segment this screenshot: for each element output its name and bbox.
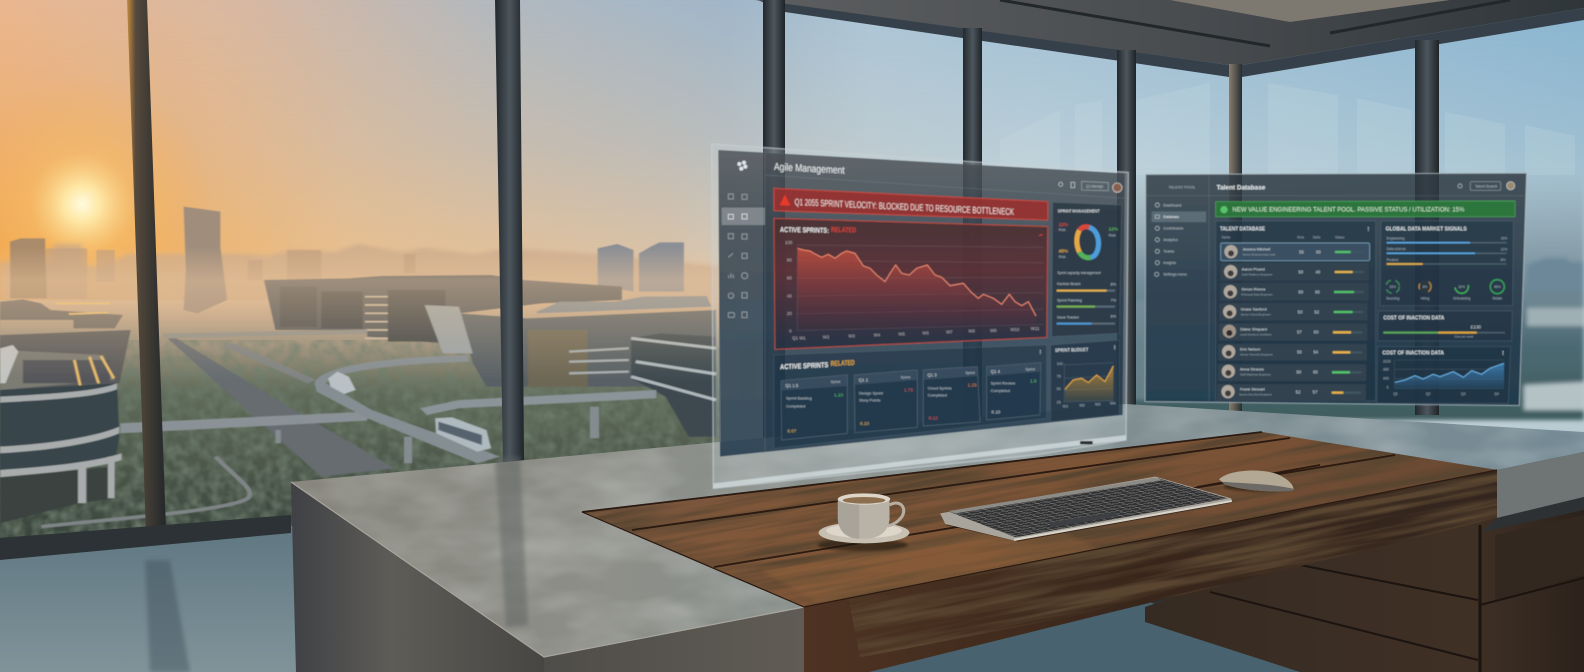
panel: cost of inaction area chart: Q2 — [1426, 392, 1431, 396]
card 1 — [781, 375, 847, 440]
panel: global market signals: 12% — [1501, 248, 1507, 252]
card 2: Design Sprint — [859, 390, 884, 395]
sidebar logo text: TALENT POOL — [1168, 184, 1196, 189]
wood grain — [585, 432, 1494, 605]
panel: global market signals — [1380, 221, 1513, 306]
panel: global market signals: Data science — [1387, 247, 1406, 251]
line chart: active sprints: 100 — [785, 240, 793, 245]
curved path — [41, 457, 250, 527]
row 2: Aaron Picard — [1242, 266, 1265, 271]
distant hazy skyline — [0, 244, 720, 335]
left building body — [0, 330, 131, 390]
row 5 — [1219, 323, 1367, 341]
campus and monorail — [0, 207, 720, 527]
card 3 — [923, 367, 980, 426]
far right campus building — [631, 333, 716, 437]
line chart: active sprints: 0 — [789, 329, 792, 334]
panel: sprint management donut and progress: Sprint capacity management — [1057, 270, 1101, 275]
floor — [0, 525, 1320, 672]
row 3: 60 — [1315, 289, 1320, 294]
panel: global market signals: Onboarding — [1453, 296, 1471, 300]
card 2: 8.10 — [860, 421, 869, 426]
line chart: active sprints: 40 — [787, 293, 792, 298]
train: upper — [328, 372, 356, 394]
panel: burndown area chart: 50 — [1057, 387, 1061, 391]
panel: sprint management donut and progress: SPRINT MANAGEMENT — [1058, 209, 1100, 214]
card 4: 8.10 — [991, 409, 1001, 414]
alert banner — [1216, 201, 1515, 217]
coffee cup and saucer — [818, 493, 909, 551]
card 1: 8.07 — [787, 429, 797, 434]
panel: burndown area chart: 75 — [1057, 375, 1061, 379]
panel: burndown area chart: 100 — [1057, 362, 1063, 366]
alert banner: NEW VALUE ENGINEERING TALENT POOL. PASSIVE STATUS / UTILIZATION: 15% — [1232, 207, 1464, 214]
sky through the windows — [0, 0, 1584, 445]
panel: cost of inaction area chart: 0 — [1387, 386, 1389, 390]
progress bars: Kanban Board — [1057, 282, 1080, 286]
glass lower edge — [713, 435, 1126, 488]
tree canopy texture — [0, 340, 720, 550]
row 4: 52 — [1314, 309, 1320, 314]
panel: global market signals: 8% — [1423, 285, 1427, 289]
panel: sprint management donut and progress: Risk — [1059, 228, 1066, 232]
panel: cost of inaction gauge — [1378, 311, 1512, 341]
window sill — [0, 515, 291, 560]
header and sidebar dividers — [1146, 176, 1525, 401]
sidebar navigation: Dashboard — [1163, 203, 1181, 207]
card 3: Sprint — [965, 371, 975, 375]
sidebar navigation: Teams — [1163, 250, 1174, 254]
card 3: Completed — [928, 393, 947, 398]
row 7: 60 — [1313, 370, 1318, 375]
icon: status circle — [1220, 206, 1228, 213]
panel: talent table: Status — [1335, 235, 1345, 239]
card 1: Q1 1.5 — [785, 383, 799, 388]
right campus building — [459, 310, 716, 387]
panel: talent table: TALENT DATABASE — [1220, 227, 1265, 233]
line chart: active sprints: W5 — [898, 331, 905, 336]
line chart: active sprints: W2 — [823, 334, 830, 339]
row 7: 50 — [1296, 370, 1302, 375]
row 1 — [1221, 243, 1370, 261]
panel: cost of inaction area chart — [1377, 347, 1511, 403]
panel: burndown area chart: W1 — [1063, 405, 1068, 409]
panel: global market signals: Product — [1387, 258, 1398, 262]
card 1: 1.10 — [834, 393, 843, 398]
card 4: 1.9 — [1030, 379, 1037, 384]
sidebar navigation: Database — [1163, 215, 1179, 219]
sidebar icons — [728, 194, 748, 318]
panel: cost of inaction gauge: Cost per week — [1454, 334, 1474, 338]
panel: cost of inaction area chart: Q3 — [1461, 392, 1466, 396]
title: Agile Management — [774, 162, 845, 177]
progress bars: Issue Tracker — [1057, 316, 1080, 320]
window frame top band — [758, 0, 1584, 78]
row 6: Eric Nelson — [1240, 346, 1260, 351]
panel: cost of inaction gauge: £130 — [1471, 325, 1481, 330]
header controls — [1059, 181, 1122, 192]
header controls: Q1 Manage — [1086, 185, 1104, 189]
card 2: 1.75 — [904, 388, 913, 393]
row 5: Lead Systems Architect — [1240, 333, 1272, 337]
line chart: active sprints: W10 — [1011, 327, 1020, 332]
panel: sprint management donut and progress: 12% — [1059, 222, 1069, 227]
sidebar navigation: Settings menu — [1163, 273, 1187, 277]
row 4 — [1219, 303, 1368, 321]
wood front face — [804, 470, 1497, 672]
panel: global market signals: 32% — [1458, 285, 1465, 289]
header controls — [1458, 182, 1515, 190]
train: lower — [435, 417, 491, 452]
card 3: 1.25 — [968, 383, 977, 388]
line chart: active sprints: W11 — [1031, 326, 1040, 331]
glass pane — [712, 144, 1128, 488]
row 8: Frank Stewart — [1240, 386, 1266, 391]
mouse — [1219, 471, 1293, 492]
progress bars: Sprint Planning — [1057, 299, 1082, 303]
progress bars: 8% — [1111, 282, 1117, 286]
progress bars — [1057, 282, 1117, 320]
towers: right pair — [598, 242, 684, 292]
panel: sprint management donut and progress: Risk — [1059, 255, 1066, 259]
left building roof deck — [0, 350, 115, 390]
panel: burndown area chart: W4 — [1110, 401, 1115, 405]
panel: cost of inaction area chart: £120 — [1383, 359, 1391, 363]
title: Talent Database — [1217, 184, 1266, 191]
panel: sprint management donut and progress: 45% — [1059, 249, 1069, 254]
boulevard — [168, 338, 395, 477]
panel: sprint management donut and progress: 12% — [1109, 227, 1119, 232]
row 5: Diane Shepard — [1240, 326, 1267, 331]
row 6: Senior Security Engineer — [1240, 353, 1273, 357]
row 4: Grace Sanford — [1241, 306, 1267, 311]
progress bars: 7% — [1111, 299, 1117, 303]
card 4: Sprint Review — [991, 381, 1015, 386]
stone desk — [291, 404, 1584, 672]
ceiling — [755, 0, 1584, 66]
card 1: Sprint — [831, 380, 840, 384]
line chart: active sprints: Q1 W1 — [792, 335, 806, 340]
front stone face — [544, 607, 804, 672]
panel: global market signals: Retain — [1493, 296, 1502, 300]
row 8: 52 — [1296, 390, 1301, 395]
wood top — [582, 432, 1497, 607]
panel: burndown area chart — [1040, 340, 1119, 422]
panel: cost of inaction area chart: COST OF INACTION DATA — [1382, 351, 1444, 357]
panel: Agile Management glass dashboard — [712, 144, 1128, 488]
panel: burndown area chart: W3 — [1095, 403, 1100, 407]
row 2: 50 — [1298, 269, 1304, 274]
panel: global market signals: Sourcing — [1386, 296, 1399, 300]
row 1: Jessica Mitchell — [1242, 246, 1270, 251]
alert banner: Q1 2055 SPRINT VELOCITY: BLOCKED DUE TO RESOURCE BOTTLENECK — [795, 197, 1015, 217]
panel: sprint management donut and progress: Risk — [1109, 233, 1116, 237]
row 1: Senior Engineering Lead — [1242, 253, 1276, 257]
row 2: Staff Platform Engineer — [1242, 273, 1272, 277]
row 7: Staff Machine Engineer — [1240, 373, 1271, 377]
panel: active sprints cards: ACTIVE SPRINTS — [780, 360, 828, 371]
left building upper roof — [0, 299, 123, 328]
panel: global market signals: 15% — [1389, 285, 1396, 289]
stone top — [291, 404, 1584, 657]
panel: global market signals: Hiring — [1421, 296, 1429, 300]
right walkway — [420, 390, 656, 415]
line chart: active sprints: 60 — [787, 276, 792, 281]
panel: burndown area chart: W2 — [1079, 404, 1085, 408]
card 1: Completed — [786, 403, 805, 408]
card 4: Sprint — [1025, 367, 1035, 371]
panel: talent table: Role — [1297, 235, 1304, 239]
right stone block — [1497, 452, 1584, 518]
sidebar navigation: Contributors — [1163, 227, 1183, 231]
panel: burndown area chart: 25 — [1057, 400, 1061, 404]
left building rotunda — [0, 383, 119, 477]
row 3: Simon Rivera — [1241, 286, 1266, 291]
row 4: 50 — [1298, 309, 1303, 314]
line chart: active sprints: ACTIVE SPRINTS: — [780, 225, 829, 235]
sidebar navigation: Insights — [1163, 261, 1176, 265]
row 7 — [1218, 364, 1366, 381]
panel: global market signals: 8% — [1501, 258, 1506, 262]
row 6: 50 — [1297, 350, 1302, 355]
logo icon — [737, 161, 747, 171]
card 1: Sprint Backlog — [786, 396, 812, 401]
lower right wood cabinets — [1145, 500, 1584, 672]
card 4 — [987, 363, 1041, 420]
row 3: 50 — [1298, 289, 1304, 294]
card 3: Q1 3 — [927, 373, 937, 378]
panel: cost of inaction gauge: COST OF INACTION DATA — [1383, 316, 1444, 322]
card 3: 8.12 — [929, 415, 938, 420]
tower: left block — [10, 238, 47, 298]
panel: active sprints cards — [774, 345, 1047, 448]
panel: global market signals: 45% — [1494, 285, 1501, 289]
tower: central skyscraper — [184, 207, 227, 313]
line chart: active sprints — [774, 218, 1048, 349]
row 7: Anna Strauss — [1240, 366, 1264, 371]
dashboard background — [718, 150, 1125, 457]
panel: cost of inaction area chart: £80 — [1383, 368, 1389, 372]
glass pane — [1145, 173, 1527, 406]
panel: active sprints cards: RELATED — [831, 358, 855, 368]
line chart: active sprints: W9 — [990, 328, 997, 333]
row 1: 60 — [1316, 249, 1321, 254]
card 2: Story Points — [859, 398, 880, 403]
warm haze over the city — [0, 247, 720, 380]
row 8: Senior DevOps Engineer — [1239, 393, 1272, 397]
icon: warning triangle — [780, 194, 790, 206]
city ground — [0, 300, 720, 550]
wood plank lines — [582, 432, 1395, 567]
glass stand clip — [1080, 441, 1093, 444]
right side hazy city — [1130, 170, 1584, 420]
row 4: Senior Cloud Engineer — [1241, 313, 1271, 317]
elevated walkway — [120, 412, 367, 433]
status rings — [1386, 280, 1504, 294]
panel: global market signals: Engineering — [1387, 236, 1405, 240]
monorail track — [314, 355, 500, 463]
wood desktop — [582, 431, 1497, 672]
line chart: active sprints: W8 — [968, 329, 975, 334]
row 6: 54 — [1313, 350, 1319, 355]
card 4: Q1 4 — [991, 369, 1001, 374]
card 2: Sprint — [901, 375, 910, 379]
row 8 — [1217, 384, 1366, 401]
line chart: active sprints: W7 — [946, 330, 953, 335]
line chart: active sprints: W4 — [874, 332, 881, 337]
panel: cost of inaction area chart: Q4 — [1494, 392, 1499, 396]
left stone face — [291, 482, 544, 672]
sidebar highlight — [722, 208, 765, 225]
line chart: active sprints: W3 — [848, 333, 856, 338]
card 4: Completed — [991, 388, 1010, 393]
sidebar navigation — [1152, 203, 1206, 277]
panel: global market signals: GLOBAL DATA MARKET SIGNALS — [1386, 227, 1467, 233]
card 3: Cloud Sprints — [928, 385, 952, 390]
panel: cost of inaction area chart: Q1 — [1393, 392, 1398, 396]
row 2 — [1220, 263, 1369, 281]
hazy walkway — [163, 329, 367, 338]
row 8: 57 — [1313, 390, 1318, 395]
window mullions — [127, 0, 1439, 533]
panel: global market signals: 15% — [1501, 237, 1507, 241]
panel: sprint management donut and progress — [1052, 202, 1122, 337]
line chart: active sprints: RELATED — [831, 225, 856, 234]
progress bars: 6% — [1111, 315, 1117, 319]
panel: talent table: Name — [1222, 235, 1231, 239]
row 1: 55 — [1299, 249, 1304, 254]
central campus building — [264, 275, 622, 343]
card 2 — [854, 370, 917, 433]
row 3: Principal Data Engineer — [1241, 293, 1273, 297]
panel: Talent Database glass dashboard: Talent Search — [1475, 184, 1497, 188]
hazy far towers — [46, 248, 415, 298]
row 3 — [1220, 283, 1369, 301]
alert banner — [774, 188, 1048, 220]
row 6 — [1218, 344, 1367, 361]
panel: Talent Database glass dashboard — [1145, 173, 1527, 406]
header divider — [765, 151, 1125, 453]
row 2: 40 — [1315, 269, 1321, 274]
keyboard — [940, 477, 1232, 542]
mullion reflection — [495, 456, 528, 628]
line chart: active sprints: 80 — [787, 258, 792, 263]
sidebar navigation: Analytics — [1163, 238, 1178, 242]
card 2: Q1 2 — [859, 378, 869, 383]
row 5: 60 — [1314, 330, 1319, 335]
panel: burndown area chart: SPRINT BUDGET — [1055, 347, 1088, 354]
line chart: active sprints: 20 — [787, 311, 792, 316]
panel: cost of inaction area chart: £40 — [1383, 377, 1389, 381]
row 5: 57 — [1297, 330, 1302, 335]
donut chart — [1077, 227, 1099, 258]
panel: talent table — [1216, 221, 1376, 401]
panel: talent table: Skills — [1313, 235, 1321, 239]
line chart: active sprints: W6 — [922, 331, 929, 336]
window reflections on the right panes — [1000, 83, 1575, 175]
